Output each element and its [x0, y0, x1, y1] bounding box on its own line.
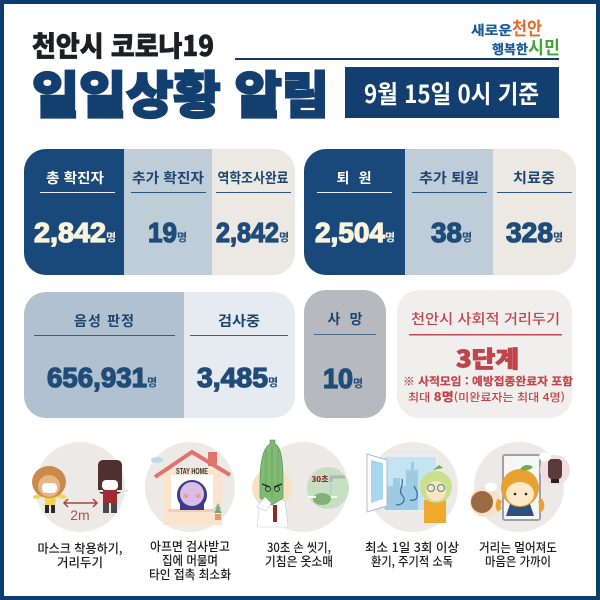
logo: slogan: 새로운	[471, 20, 512, 39]
stat: added confirmed: 명	[177, 229, 187, 245]
panel: social distancing	[397, 290, 573, 418]
caption: ventilation	[365, 537, 459, 570]
icon: hand washing cucumber: 30초	[311, 474, 329, 485]
stat: added confirmed: 추가 확진자	[132, 168, 204, 188]
caption: stay home: 아프면 검사받고	[150, 536, 230, 555]
caption: hand washing	[265, 537, 333, 570]
caption: mask: 거리두기	[57, 552, 103, 571]
title: daily status: 일일상황 알림	[32, 56, 329, 128]
note line 1: ※ 사적모임 : 예방접종완료자 포함	[403, 373, 573, 389]
caption: stay home: 집에 머물며	[162, 550, 218, 569]
caption: stay home	[149, 536, 231, 583]
panel: deaths: 10	[323, 363, 353, 394]
caption: closeness	[479, 537, 557, 570]
stat: in treatment: 치료중	[513, 168, 555, 188]
stat: under test: 3,485	[197, 362, 268, 393]
stat: negative	[34, 311, 175, 393]
stat: discharged total: 명	[385, 229, 395, 245]
panel: confirmed cases	[24, 149, 295, 275]
logo: slogan: 천안	[512, 15, 542, 41]
stat: negative: 음성 판정	[74, 311, 134, 331]
icon: stay home: STAY HOME	[176, 467, 208, 476]
stat: total confirmed: 2,842	[34, 217, 106, 248]
caption: hand washing: 30초 손 씻기,	[267, 537, 331, 556]
panel: deaths: 명	[353, 375, 363, 391]
icon: ventilation window	[367, 442, 458, 532]
level: 3단계	[456, 340, 519, 374]
stat: total confirmed: 명	[106, 229, 116, 245]
caption: ventilation: 환기, 주기적 소독	[371, 551, 453, 570]
panel: deaths: 사 망	[328, 309, 363, 329]
stat: in treatment: 328	[506, 217, 553, 248]
caption: hand washing: 기침은 옷소매	[265, 551, 333, 570]
caption: mask: 마스크 착용하기,	[38, 538, 123, 557]
panel: test results	[24, 292, 295, 418]
logo: slogan	[471, 15, 560, 60]
stat: added discharged: 추가 퇴원	[419, 168, 479, 188]
caption: stay home: 타인 접촉 최소화	[149, 564, 231, 583]
icon: stay home	[145, 442, 235, 532]
icon: video call closeness	[470, 442, 570, 532]
stat: discharged total: 퇴 원	[336, 168, 372, 188]
stat: investigation complete	[216, 168, 291, 248]
stat: in treatment	[497, 168, 572, 248]
logo: slogan: 행복한	[492, 39, 528, 58]
caption: mask	[38, 538, 123, 571]
stat: added discharged	[412, 168, 487, 248]
stat: investigation complete: 명	[279, 229, 289, 245]
stat: in treatment: 명	[553, 229, 563, 245]
stat: under test	[190, 311, 288, 393]
date badge	[345, 67, 559, 118]
stat: added confirmed: 19	[148, 217, 177, 248]
stat: negative: 656,931	[47, 362, 147, 393]
stat: under test: 검사중	[218, 311, 260, 331]
panel: social distancing: 천안시 사회적 거리두기	[411, 309, 560, 329]
stat: discharged total	[315, 168, 395, 248]
stat: investigation complete: 2,842	[216, 217, 279, 248]
icon: mask and 2m distance: 2m	[70, 507, 90, 523]
stat: total confirmed	[34, 168, 116, 248]
stat: added discharged: 38	[431, 217, 462, 248]
panel: discharged	[304, 149, 576, 275]
caption: ventilation: 최소 1일 3회 이상	[365, 537, 459, 556]
stat: investigation complete: 역학조사완료	[218, 168, 289, 188]
stat: under test: 명	[268, 374, 278, 390]
icon: mask and 2m distance	[32, 442, 128, 532]
stat: added confirmed	[131, 168, 206, 248]
panel: deaths	[304, 290, 386, 418]
caption: closeness: 거리는 멀어져도	[479, 537, 557, 556]
logo: slogan: 시민	[528, 34, 560, 60]
caption: closeness: 마음은 가까이	[485, 551, 551, 570]
stat: discharged total: 2,504	[315, 217, 385, 248]
icon: hand washing cucumber	[252, 440, 349, 532]
stat: total confirmed: 총 확진자	[46, 168, 104, 188]
date badge: 9월 15일 0시 기준	[364, 75, 539, 111]
stat: added discharged: 명	[462, 229, 472, 245]
header rule	[235, 58, 559, 60]
stat: negative: 명	[147, 374, 157, 390]
note line 2: 최대 8명(미완료자는 최대 4명)	[408, 388, 565, 405]
title: city corona line: 천안시 코로나19	[32, 25, 214, 65]
